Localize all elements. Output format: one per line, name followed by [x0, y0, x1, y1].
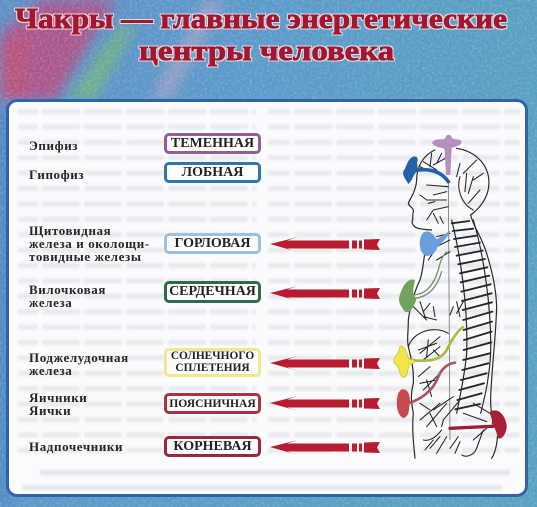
arrow: solar plexus: [270, 356, 380, 371]
gland label: thymus: [29, 282, 106, 310]
arrow: sacral: [270, 396, 380, 411]
body outline: [408, 148, 497, 458]
gland label: pancreas: железа: [29, 363, 72, 378]
gland label: Эпифиз: Эпифиз: [29, 138, 78, 153]
gland label: thyroid: железа и околощи-: [29, 236, 150, 251]
chakra box: crown: [164, 133, 261, 154]
nerves: [408, 153, 490, 456]
chakra box: brow: [164, 162, 261, 183]
icon: brow gland: [403, 156, 448, 184]
icon: crown gland: [432, 135, 462, 175]
chakra box: crown: ТЕМЕННАЯ: [171, 136, 254, 150]
chakra box: heart: СЕРДЕЧНАЯ: [169, 284, 256, 299]
chakra box: solar plexus: [164, 348, 261, 377]
title: [14, 4, 508, 68]
chakra box: throat: [164, 233, 261, 254]
title: центры человека: [139, 36, 394, 67]
icon: sacral gland: [397, 363, 455, 418]
chakra box: throat: ГОРЛОВАЯ: [175, 236, 250, 250]
gland label: pancreas: [29, 350, 129, 378]
chakra box: solar plexus: СПЛЕТЕНИЯ: [175, 362, 250, 374]
chakra box: root: [164, 436, 261, 457]
chakra box: brow: ЛОБНАЯ: [182, 164, 243, 180]
chakra box: solar plexus: СОЛНЕЧНОГО: [171, 350, 254, 362]
gland label: thyroid: товидные железы: [29, 249, 142, 264]
panel: chakra table: [6, 99, 528, 497]
gland label: adrenal: Надпочечники: [29, 439, 123, 454]
arrow: heart: [270, 286, 380, 301]
title: Чакры — главные энергетические: [15, 4, 507, 35]
icon: solar plexus gland: [394, 327, 463, 378]
chakra box: heart: [164, 281, 261, 303]
gland label: gonads: [29, 390, 87, 418]
chakra box: sacral: ПОЯСНИЧНАЯ: [169, 396, 256, 410]
gland label: thymus: Вилочковая: [29, 282, 106, 297]
spine and ribs: [452, 220, 492, 413]
gland label: pancreas: Поджелудочная: [29, 350, 129, 365]
arrow: root: [270, 440, 380, 455]
chakra box: sacral: [164, 393, 261, 414]
gland label: gonads: Яичники: [29, 390, 87, 405]
icon: throat gland: [420, 231, 451, 256]
gland label: thyroid: [29, 223, 150, 264]
gland label: thymus: железа: [29, 295, 72, 310]
icon: heart gland: [399, 252, 447, 312]
arrow: throat: [270, 237, 380, 252]
chakra box: root: КОРНЕВАЯ: [173, 438, 252, 454]
icon: root gland: [450, 410, 507, 439]
gland label: Гипофиз: Гипофиз: [29, 167, 84, 182]
gland label: gonads: Яички: [29, 403, 71, 418]
gland label: thyroid: Щитовидная: [29, 223, 111, 238]
